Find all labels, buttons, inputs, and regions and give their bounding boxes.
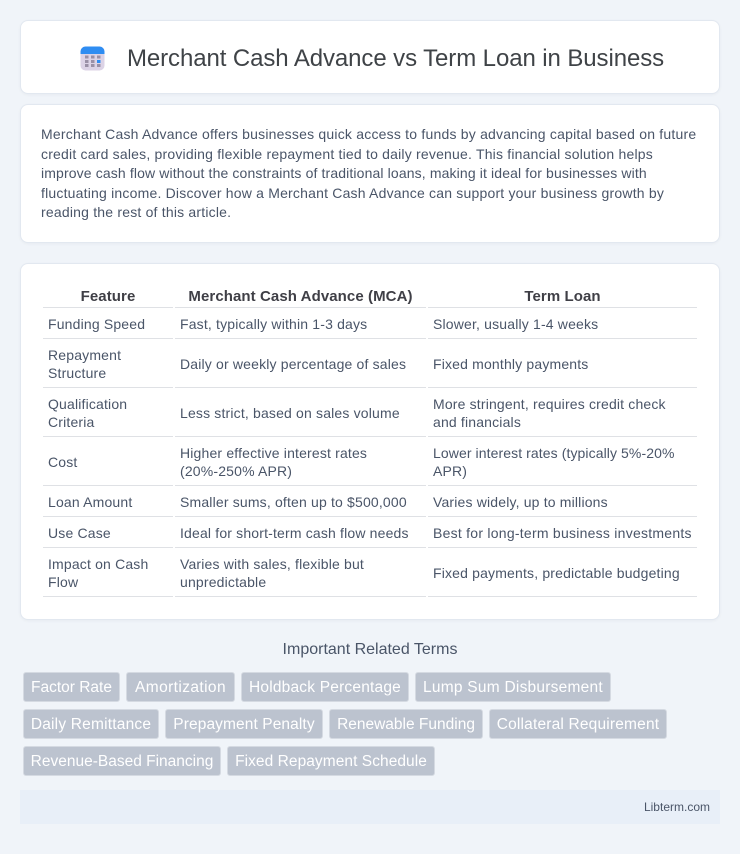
- panel: comparison table: [20, 263, 720, 620]
- related term tags: Holdback Percentage: [249, 679, 401, 696]
- panel: introduction: [20, 104, 720, 243]
- row: cost: Higher effective interest rates: [180, 445, 367, 461]
- text block: introduction: Merchant Cash Advance offers businesses quick access to funds by advancing capital based on future: [41, 126, 696, 142]
- row: repayment structure: Daily or weekly percentage of sales: [180, 356, 406, 372]
- row: loan amount: Loan Amount: [48, 494, 132, 510]
- row: use case: Use Case: [48, 525, 111, 541]
- row: use case: Ideal for short-term cash flow needs: [180, 525, 409, 541]
- footer bar: [20, 790, 720, 824]
- row: loan amount: [48, 494, 608, 510]
- row: repayment structure: Structure: [48, 365, 106, 381]
- row: repayment structure: Fixed monthly payments: [433, 356, 588, 372]
- row: impact on cash flow: Fixed payments, predictable budgeting: [433, 565, 680, 581]
- related term tags: Revenue-Based Financing: [31, 753, 213, 770]
- row: use case: [48, 525, 692, 541]
- row: funding speed: Slower, usually 1-4 weeks: [433, 316, 598, 332]
- row: impact on cash flow: unpredictable: [180, 574, 266, 590]
- related term tags: Prepayment Penalty: [173, 716, 315, 733]
- related term tags: Lump Sum Disbursement: [423, 679, 603, 696]
- text block: introduction: [41, 126, 696, 220]
- row: qualification criteria: and financials: [433, 414, 521, 430]
- row: impact on cash flow: Impact on Cash: [48, 556, 148, 572]
- row: impact on cash flow: [48, 556, 680, 590]
- text block: introduction: credit card sales, providing flexible repayment tied to daily revenue. This financial solution helps: [41, 146, 653, 162]
- table header: Feature: [81, 288, 135, 305]
- text block: introduction: reading the rest of this article.: [41, 204, 231, 220]
- row: funding speed: Funding Speed: [48, 316, 145, 332]
- row: qualification criteria: [48, 396, 666, 430]
- row: cost: APR): [433, 463, 467, 479]
- row: repayment structure: Repayment: [48, 347, 121, 363]
- row: qualification criteria: Criteria: [48, 414, 94, 430]
- row: use case: Best for long-term business investments: [433, 525, 692, 541]
- comparison table: [43, 288, 697, 597]
- related term tags: Amortization: [135, 679, 226, 696]
- footer text: Libterm.com: [644, 800, 710, 814]
- icon: calendar: [80, 46, 104, 70]
- row: cost: [48, 445, 675, 479]
- text block: introduction: improve cash flow without the constraints of traditional loans, making it ideal for businesses with: [41, 165, 647, 181]
- row: repayment structure: [48, 347, 588, 381]
- title: Merchant Cash Advance vs Term Loan in Business: [127, 45, 664, 72]
- row: impact on cash flow: Flow: [48, 574, 78, 590]
- row: qualification criteria: Qualification: [48, 396, 127, 412]
- row: qualification criteria: Less strict, based on sales volume: [180, 405, 400, 421]
- row: funding speed: [48, 316, 598, 332]
- row: cost: Lower interest rates (typically 5%-20%: [433, 445, 675, 461]
- related term tags: Collateral Requirement: [497, 716, 659, 733]
- header panel: [20, 20, 720, 94]
- related term tags: Renewable Funding: [337, 716, 475, 733]
- related term tags: [23, 672, 667, 776]
- row: impact on cash flow: Varies with sales, flexible but: [180, 556, 364, 572]
- row: funding speed: Fast, typically within 1-3 days: [180, 316, 367, 332]
- row: cost: (20%-250% APR): [180, 463, 292, 479]
- table header: [81, 288, 601, 305]
- row: cost: Cost: [48, 454, 77, 470]
- related term tags: Fixed Repayment Schedule: [235, 753, 427, 770]
- row: loan amount: Varies widely, up to millions: [433, 494, 608, 510]
- related term tags: Factor Rate: [31, 679, 112, 696]
- text block: introduction: fluctuating income. Discover how a Merchant Cash Advance can support your business growth by: [41, 185, 664, 201]
- heading: important related terms: Important Related Terms: [283, 641, 457, 658]
- table header: Term Loan: [524, 288, 601, 305]
- row: loan amount: Smaller sums, often up to $500,000: [180, 494, 407, 510]
- row: qualification criteria: More stringent, requires credit check: [433, 396, 666, 412]
- table header: Merchant Cash Advance (MCA): [188, 288, 413, 305]
- related term tags: Daily Remittance: [31, 716, 151, 733]
